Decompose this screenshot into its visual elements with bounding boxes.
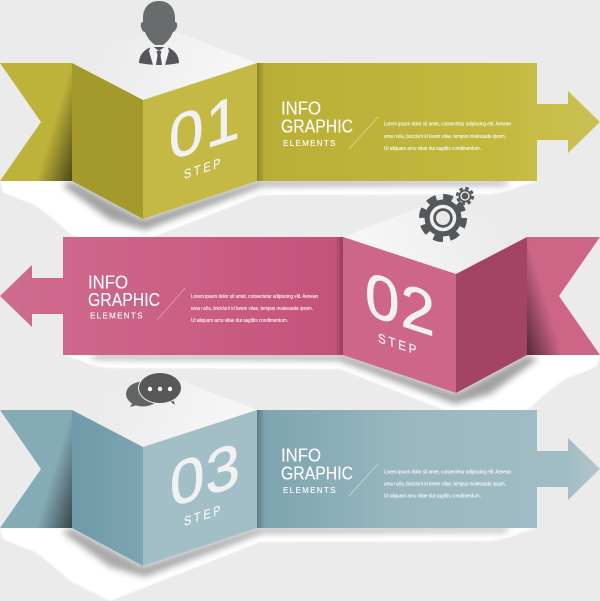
- number 01: 01: [169, 81, 242, 174]
- divider 03: [349, 464, 378, 496]
- paragraph 01: urna nulla, tincidunt id lorem vitae, tempus malesuada ipsum.: [384, 134, 506, 140]
- left face 03: [72, 410, 143, 566]
- heading 02: [88, 272, 160, 320]
- heading 03: INFO: [281, 446, 321, 466]
- step label 02: STEP: [378, 330, 419, 358]
- panel: step 02: [0, 188, 600, 428]
- banner 02: [0, 237, 343, 355]
- banner 03: [257, 410, 600, 528]
- heading 02: ELEMENTS: [90, 312, 145, 320]
- paper shadow 01: [0, 181, 537, 254]
- heading 03: GRAPHIC: [281, 462, 353, 484]
- left face 01: [72, 63, 143, 219]
- heading 01: INFO: [281, 98, 321, 118]
- paragraph 02: [191, 294, 318, 324]
- paragraph 01: Lorem ipsum dolor sit amet, consectetur adipiscing elit. Aenean: [384, 122, 511, 128]
- heading 01: [281, 98, 353, 148]
- divider 01: [349, 117, 378, 149]
- top face 02: [343, 204, 527, 274]
- heading 03: ELEMENTS: [283, 486, 338, 495]
- ribbon tail 03: [0, 410, 72, 528]
- banner 01: [257, 63, 600, 181]
- paragraph 02: urna nulla, tincidunt id lorem vitae, tempus malesuada ipsum.: [191, 306, 313, 312]
- ribbon tail 02: [527, 237, 600, 355]
- panel: step 03: [0, 372, 600, 601]
- paragraph 03: Lorem ipsum dolor sit amet, consectetur adipiscing elit. Aenean: [384, 470, 511, 476]
- panel: step 01: [0, 1, 600, 254]
- divider 02: [157, 288, 185, 320]
- paragraph 01: Ut aliquam arcu vitae dui sagittis condimentum.: [384, 146, 481, 152]
- top face 01: [72, 30, 257, 100]
- number 03: 03: [170, 429, 241, 521]
- number 02: 02: [365, 258, 436, 351]
- step label 03: STEP: [184, 502, 223, 529]
- icon: gears: [422, 188, 473, 239]
- icon: speech bubbles: [126, 372, 182, 407]
- front face 03: [143, 410, 257, 566]
- heading 01: GRAPHIC: [281, 116, 353, 136]
- top face 03: [72, 377, 257, 447]
- paragraph 01: [384, 122, 511, 152]
- paragraph 02: Ut aliquam arcu vitae dui sagittis condimentum.: [191, 318, 288, 324]
- paper shadow 03: [0, 528, 537, 601]
- paper shadow 02: [63, 355, 600, 428]
- step label 01: STEP: [184, 155, 223, 182]
- front face 02: [343, 237, 456, 393]
- heading 02: INFO: [88, 272, 128, 292]
- heading 01: ELEMENTS: [283, 139, 338, 148]
- paragraph 02: Lorem ipsum dolor sit amet, consectetur adipiscing elit. Aenean: [191, 294, 318, 300]
- heading 02: GRAPHIC: [88, 289, 160, 310]
- icon: businessman: [139, 1, 179, 65]
- paragraph 03: [384, 470, 511, 500]
- paragraph 03: Ut aliquam arcu vitae dui sagittis condimentum.: [384, 494, 481, 500]
- paragraph 03: urna nulla, tincidunt id lorem vitae, tempus malesuada ipsum.: [384, 482, 506, 488]
- right face 02: [456, 237, 527, 393]
- front face 01: [143, 63, 257, 219]
- ribbon tail 01: [0, 63, 72, 181]
- heading 03: [281, 446, 353, 495]
